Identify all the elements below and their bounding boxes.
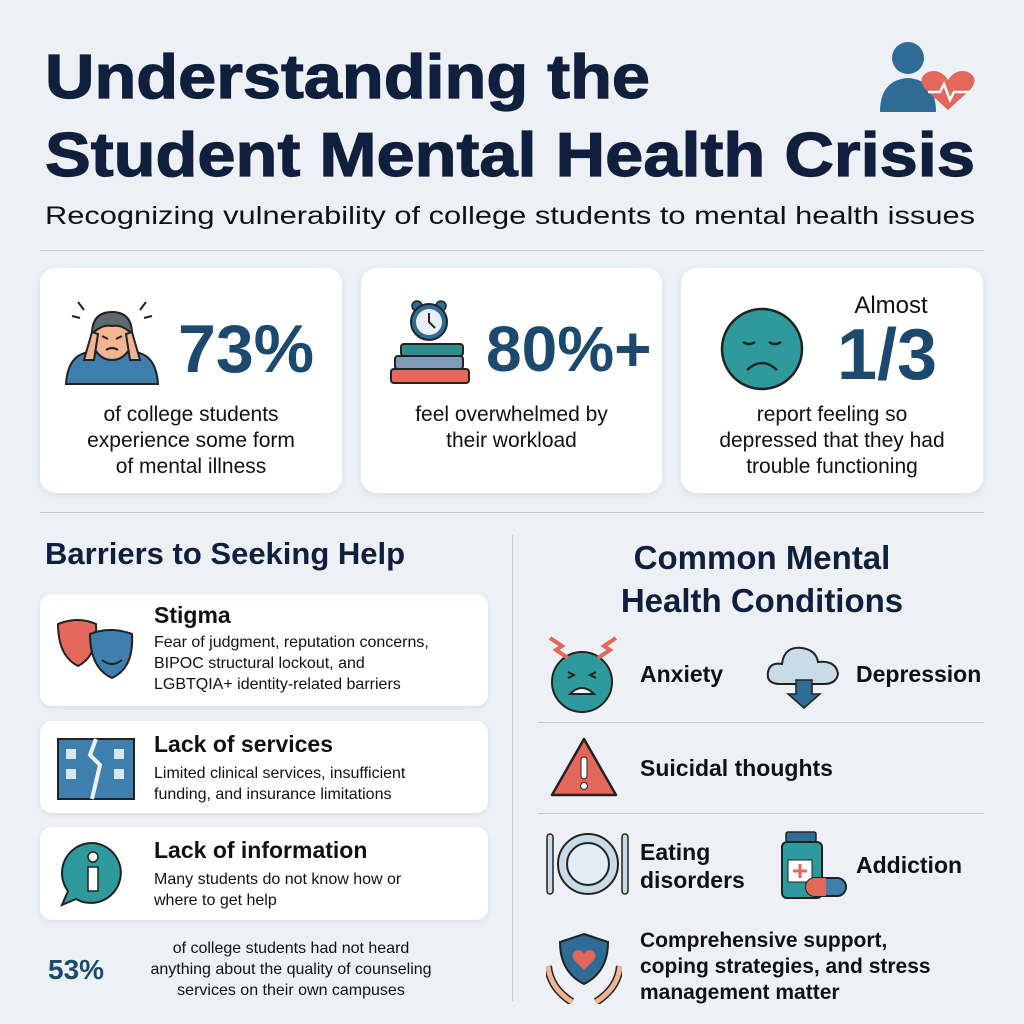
stat card: almost 1/3: report feeling so [757,403,907,426]
barrier: stigma: BIPOC structural lockout, and [154,655,365,672]
stat: 53% [48,940,432,999]
icon: person with heart [880,42,974,112]
stat card: almost 1/3: 1/3 [837,315,937,395]
stat card: almost 1/3 [681,268,983,493]
icon: masks [57,619,134,680]
title: Student Mental Health Crisis [45,121,975,190]
barrier: lack of information: Lack of information [154,837,367,863]
stat card: 80%+: feel overwhelmed by [415,403,608,426]
barrier: stigma [40,594,488,706]
closing note: comprehensive support: management matter [640,981,840,1004]
stat card: almost 1/3: Almost [854,292,928,319]
heading: common conditions: Health Conditions [621,582,903,619]
stat card: 80%+: 80%+ [486,313,651,385]
condition: addiction: Addiction [856,852,962,878]
barrier: lack of services: Lack of services [154,731,333,757]
barrier: stigma: Fear of judgment, reputation concerns, [154,634,429,651]
closing note: comprehensive support: Comprehensive support, [640,929,887,952]
barrier: lack of information: where to get help [154,892,277,909]
stat card: 80%+: their workload [446,429,577,452]
title [45,43,975,190]
stat card: almost 1/3: depressed that they had [719,429,945,452]
title: Understanding the [45,43,650,112]
condition: suicidal thoughts [550,738,833,796]
condition: anxiety [549,636,723,713]
barrier: lack of services: Limited clinical services, insufficient [154,765,405,782]
icon: broken building [57,738,135,800]
icon: sad face [720,308,804,390]
condition: addiction [781,831,962,899]
condition: suicidal thoughts: Suicidal thoughts [640,755,833,781]
stat card: 80%+ [361,268,662,493]
stat card: almost 1/3: trouble functioning [746,455,918,478]
barrier: lack of information [40,827,488,920]
icon: stressed student [64,301,160,385]
condition: eating disorders [546,833,745,895]
stat: 53%: 53% [48,954,104,985]
stat card: 73%: experience some form [87,429,295,452]
stat card: 73%: of mental illness [116,455,266,478]
stat: 53%: services on their own campuses [177,982,405,999]
barrier: lack of services: funding, and insurance limitations [154,786,391,803]
barrier: stigma: Stigma [154,602,231,628]
closing note: comprehensive support: coping strategies, and stress [640,955,931,978]
stat card: 73%: 73% [178,311,314,387]
icon: info bubble [60,842,122,907]
condition: depression: Depression [856,661,981,687]
closing note: comprehensive support [546,929,931,1004]
heading: barriers: Barriers to Seeking Help [45,536,405,571]
heading: common conditions: Common Mental [634,539,890,576]
condition: anxiety: Anxiety [640,661,723,687]
subtitle: Recognizing vulnerability of college students to mental health issues [45,202,975,230]
icon: books and alarm clock [390,300,470,384]
condition: eating disorders: Eating [640,839,710,865]
barrier: lack of information: Many students do not know how or [154,871,401,888]
heading: common conditions [621,539,903,619]
barrier: lack of services [40,721,488,813]
condition: eating disorders: disorders [640,867,745,893]
stat: 53%: anything about the quality of counseling [150,961,432,978]
condition: depression [766,646,981,709]
stat: 53%: of college students had not heard [173,940,409,957]
barrier: stigma: LGBTQIA+ identity-related barriers [154,676,401,693]
stat card: 73% [40,268,342,493]
stat card: 73%: of college students [103,403,279,426]
